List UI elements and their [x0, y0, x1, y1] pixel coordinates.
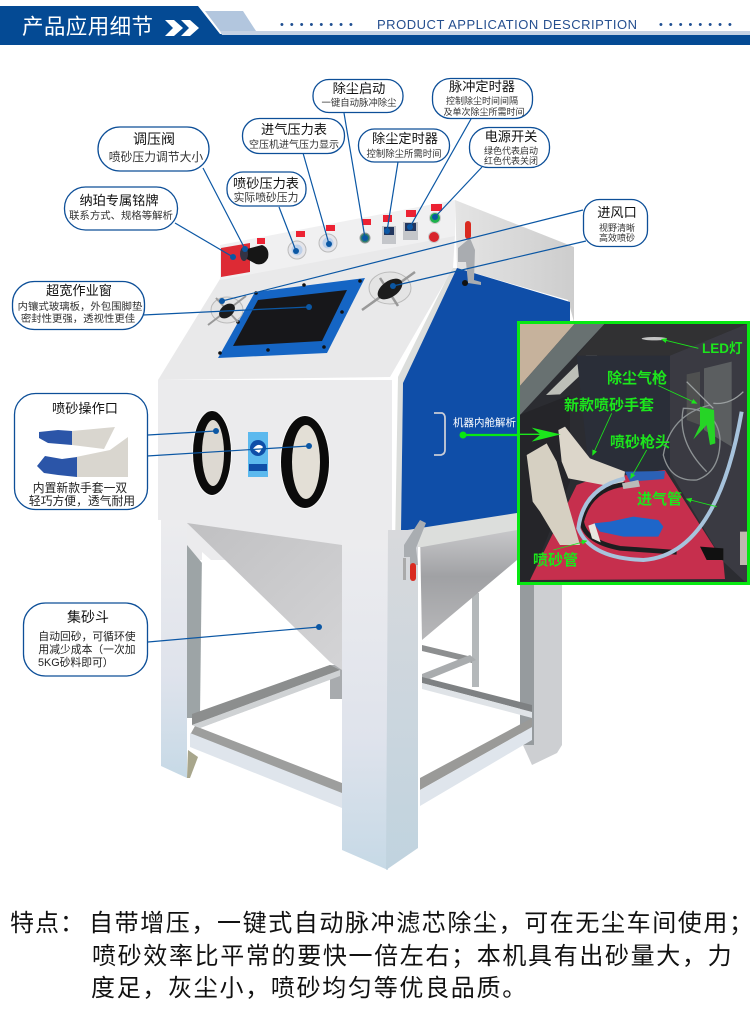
safety sticker — [248, 432, 268, 477]
callout: sand hopper: 自动回砂，可循环使 — [38, 630, 136, 643]
leader lines — [143, 113, 586, 642]
callout: air inlet: 进风口 — [597, 205, 637, 220]
callout: wide window: 超宽作业窗 — [46, 282, 112, 298]
feature description: 特点： — [10, 910, 85, 937]
top side panel — [455, 200, 574, 322]
callout: blast gauge: 实际喷砂压力 — [234, 190, 298, 204]
inset labels: 新款喷砂手套 — [564, 396, 654, 414]
dust timer — [382, 226, 396, 244]
red labels — [257, 204, 442, 244]
callout: sand hopper: 5KG砂料即可） — [38, 655, 114, 669]
inset green border — [518, 322, 748, 584]
upper latch — [458, 221, 481, 286]
callout: air inlet — [584, 200, 648, 246]
callout: nameplate — [64, 187, 178, 230]
callout: pulse timer: 及单次除尘所需时间 — [443, 106, 525, 117]
side rim — [395, 268, 517, 547]
interior callout pointer — [453, 416, 519, 438]
callout: operation port: 内置新款手套一双 — [33, 481, 127, 495]
front left leg — [161, 520, 187, 778]
icon: lower glove — [37, 437, 128, 477]
viewing window — [218, 278, 365, 358]
callout: wide window — [12, 282, 144, 330]
header title: 产品应用细节 — [22, 15, 153, 39]
base frame — [190, 718, 532, 808]
inlet pressure gauge — [319, 234, 337, 252]
right side hopper — [420, 513, 517, 640]
slanted upper front — [158, 235, 455, 380]
operation port left — [192, 410, 232, 496]
header banner: •••••••• — [659, 19, 738, 31]
callout: nameplate: 纳珀专属铭牌 — [79, 192, 159, 208]
callout: air inlet: 视野清晰 — [599, 222, 635, 233]
front right leg — [342, 540, 388, 870]
callout: nameplate: 联系方式、规格等解析 — [69, 209, 173, 222]
interior callout pointer: 机器内舱解析 — [453, 416, 516, 429]
callout: dust timer: 控制除尘所需时间 — [366, 148, 442, 159]
header dots: •••••••• — [280, 19, 359, 31]
nameplate — [221, 243, 250, 277]
callout: power switch: 绿色代表启动 — [484, 145, 538, 156]
door handle — [434, 413, 445, 455]
callout: pressure valve: 调压阀 — [133, 131, 175, 147]
callout: pulse timer: 脉冲定时器 — [449, 79, 515, 94]
right air inlet fan — [362, 272, 415, 310]
pulse timer — [403, 222, 418, 240]
callout: inlet gauge — [242, 118, 344, 154]
callout: blast gauge — [227, 172, 306, 206]
feature description: 自带增压，一键式自动脉冲滤芯除尘，可在无尘车间使用； — [89, 910, 750, 937]
back legs and frame — [192, 575, 562, 765]
inset labels: 除尘气枪 — [607, 369, 667, 387]
callout: pulse timer: 控制除尘时间间隔 — [446, 95, 518, 106]
callout: air inlet: 高效喷砂 — [599, 232, 635, 243]
feature description — [10, 910, 750, 1002]
dust start button — [360, 233, 370, 243]
sandblasting machine — [158, 200, 574, 870]
inset labels: 进气管 — [637, 490, 682, 508]
callout: operation port: 轻巧方便，透气耐用 — [29, 494, 135, 508]
callout: inlet gauge: 进气压力表 — [261, 122, 327, 137]
callout: wide window: 密封性更强，透视性更佳 — [21, 312, 135, 325]
callout: power switch: 红色代表关闭 — [484, 155, 538, 166]
red power button — [428, 232, 440, 242]
callout: pulse timer — [432, 78, 532, 118]
control panel — [220, 200, 455, 280]
inset labels: 喷砂管 — [533, 551, 578, 569]
left inner leg — [187, 523, 202, 718]
callout: power switch — [470, 128, 550, 168]
operation port right — [280, 415, 330, 509]
white opening behind hopper — [200, 552, 328, 715]
callout: inlet gauge: 空压机进气压力显示 — [249, 138, 339, 151]
callout: blast gauge: 喷砂压力表 — [233, 176, 299, 191]
inset labels — [533, 341, 743, 569]
lower latch — [403, 520, 426, 581]
callout: sand hopper: 集砂斗 — [67, 609, 109, 625]
front face — [158, 380, 392, 560]
callout: dust start: 一键自动脉冲除尘 — [321, 97, 397, 108]
callout: power switch: 电源开关 — [485, 129, 537, 144]
left air inlet fan — [208, 296, 246, 325]
callout: pressure valve — [98, 127, 209, 171]
callout: operation port — [14, 394, 148, 510]
pressure regulator — [240, 245, 268, 264]
callout: dust start: 除尘启动 — [333, 81, 385, 96]
blast pressure gauge — [288, 241, 306, 259]
hopper front — [187, 523, 342, 670]
inset labels: LED灯 — [702, 341, 743, 356]
header banner — [0, 6, 750, 45]
callout: pressure valve: 喷砂压力调节大小 — [109, 150, 203, 164]
icon: upper glove — [39, 427, 115, 449]
green power button — [430, 212, 440, 224]
callout: dust timer — [358, 129, 450, 162]
inset: machine interior — [510, 322, 750, 585]
chevrons icon — [165, 20, 199, 36]
inset labels: 喷砂枪头 — [610, 433, 670, 451]
callout: operation port: 喷砂操作口 — [52, 401, 118, 416]
callout: wide window: 内镶式玻璃板，外包围脚垫 — [18, 300, 143, 313]
header subtitle: PRODUCT APPLICATION DESCRIPTION — [377, 17, 637, 32]
blue side door — [401, 268, 570, 531]
feature description: 喷砂效率比平常的要快一倍左右；本机具有出砂量大，力 — [92, 943, 733, 970]
callout: sand hopper: 用减少成本（一次加 — [38, 642, 136, 656]
callout: dust start — [313, 80, 403, 112]
feature description: 度足，灰尘小，喷砂均匀等优良品质。 — [91, 975, 528, 1002]
callout: dust timer: 除尘定时器 — [372, 131, 438, 146]
left foot — [187, 750, 198, 778]
callout: sand hopper — [24, 603, 148, 676]
